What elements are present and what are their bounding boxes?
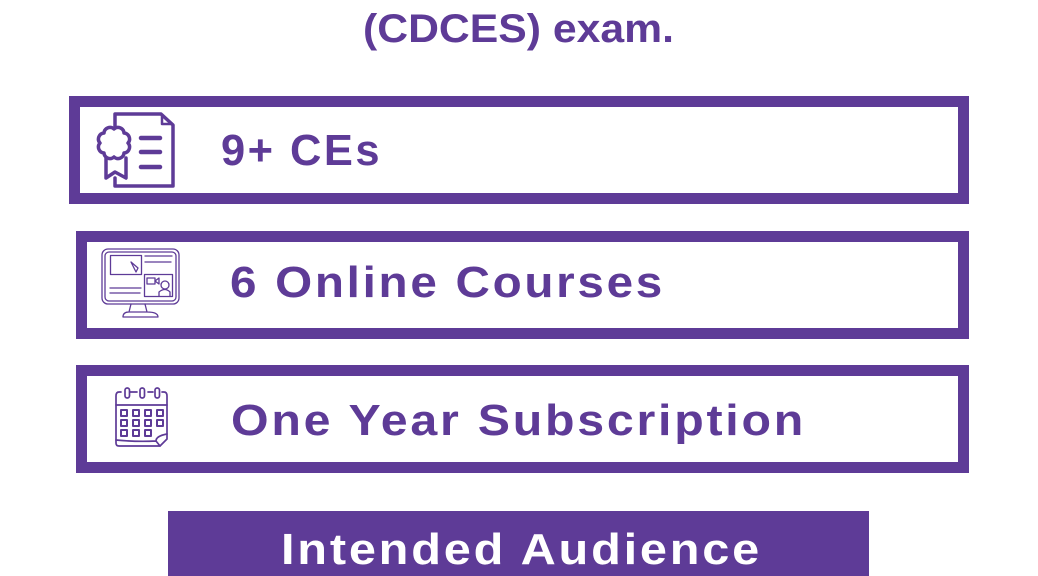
panel: 6 Online Courses (82, 236, 964, 334)
panel: 9+ CEs (74, 102, 964, 198)
panel: One Year Subscription (82, 370, 964, 468)
banner: Intended Audience: Intended Audience (281, 525, 762, 574)
label: 9+ CEs (221, 126, 382, 175)
heading: (CDCES) exam. (363, 7, 674, 51)
icon: calendar (116, 388, 167, 446)
banner: Intended Audience (168, 511, 869, 576)
icon: computer monitor (102, 249, 179, 317)
label: One Year Subscription (231, 396, 806, 445)
icon: certificate document (98, 114, 173, 186)
label: 6 Online Courses (230, 258, 665, 307)
